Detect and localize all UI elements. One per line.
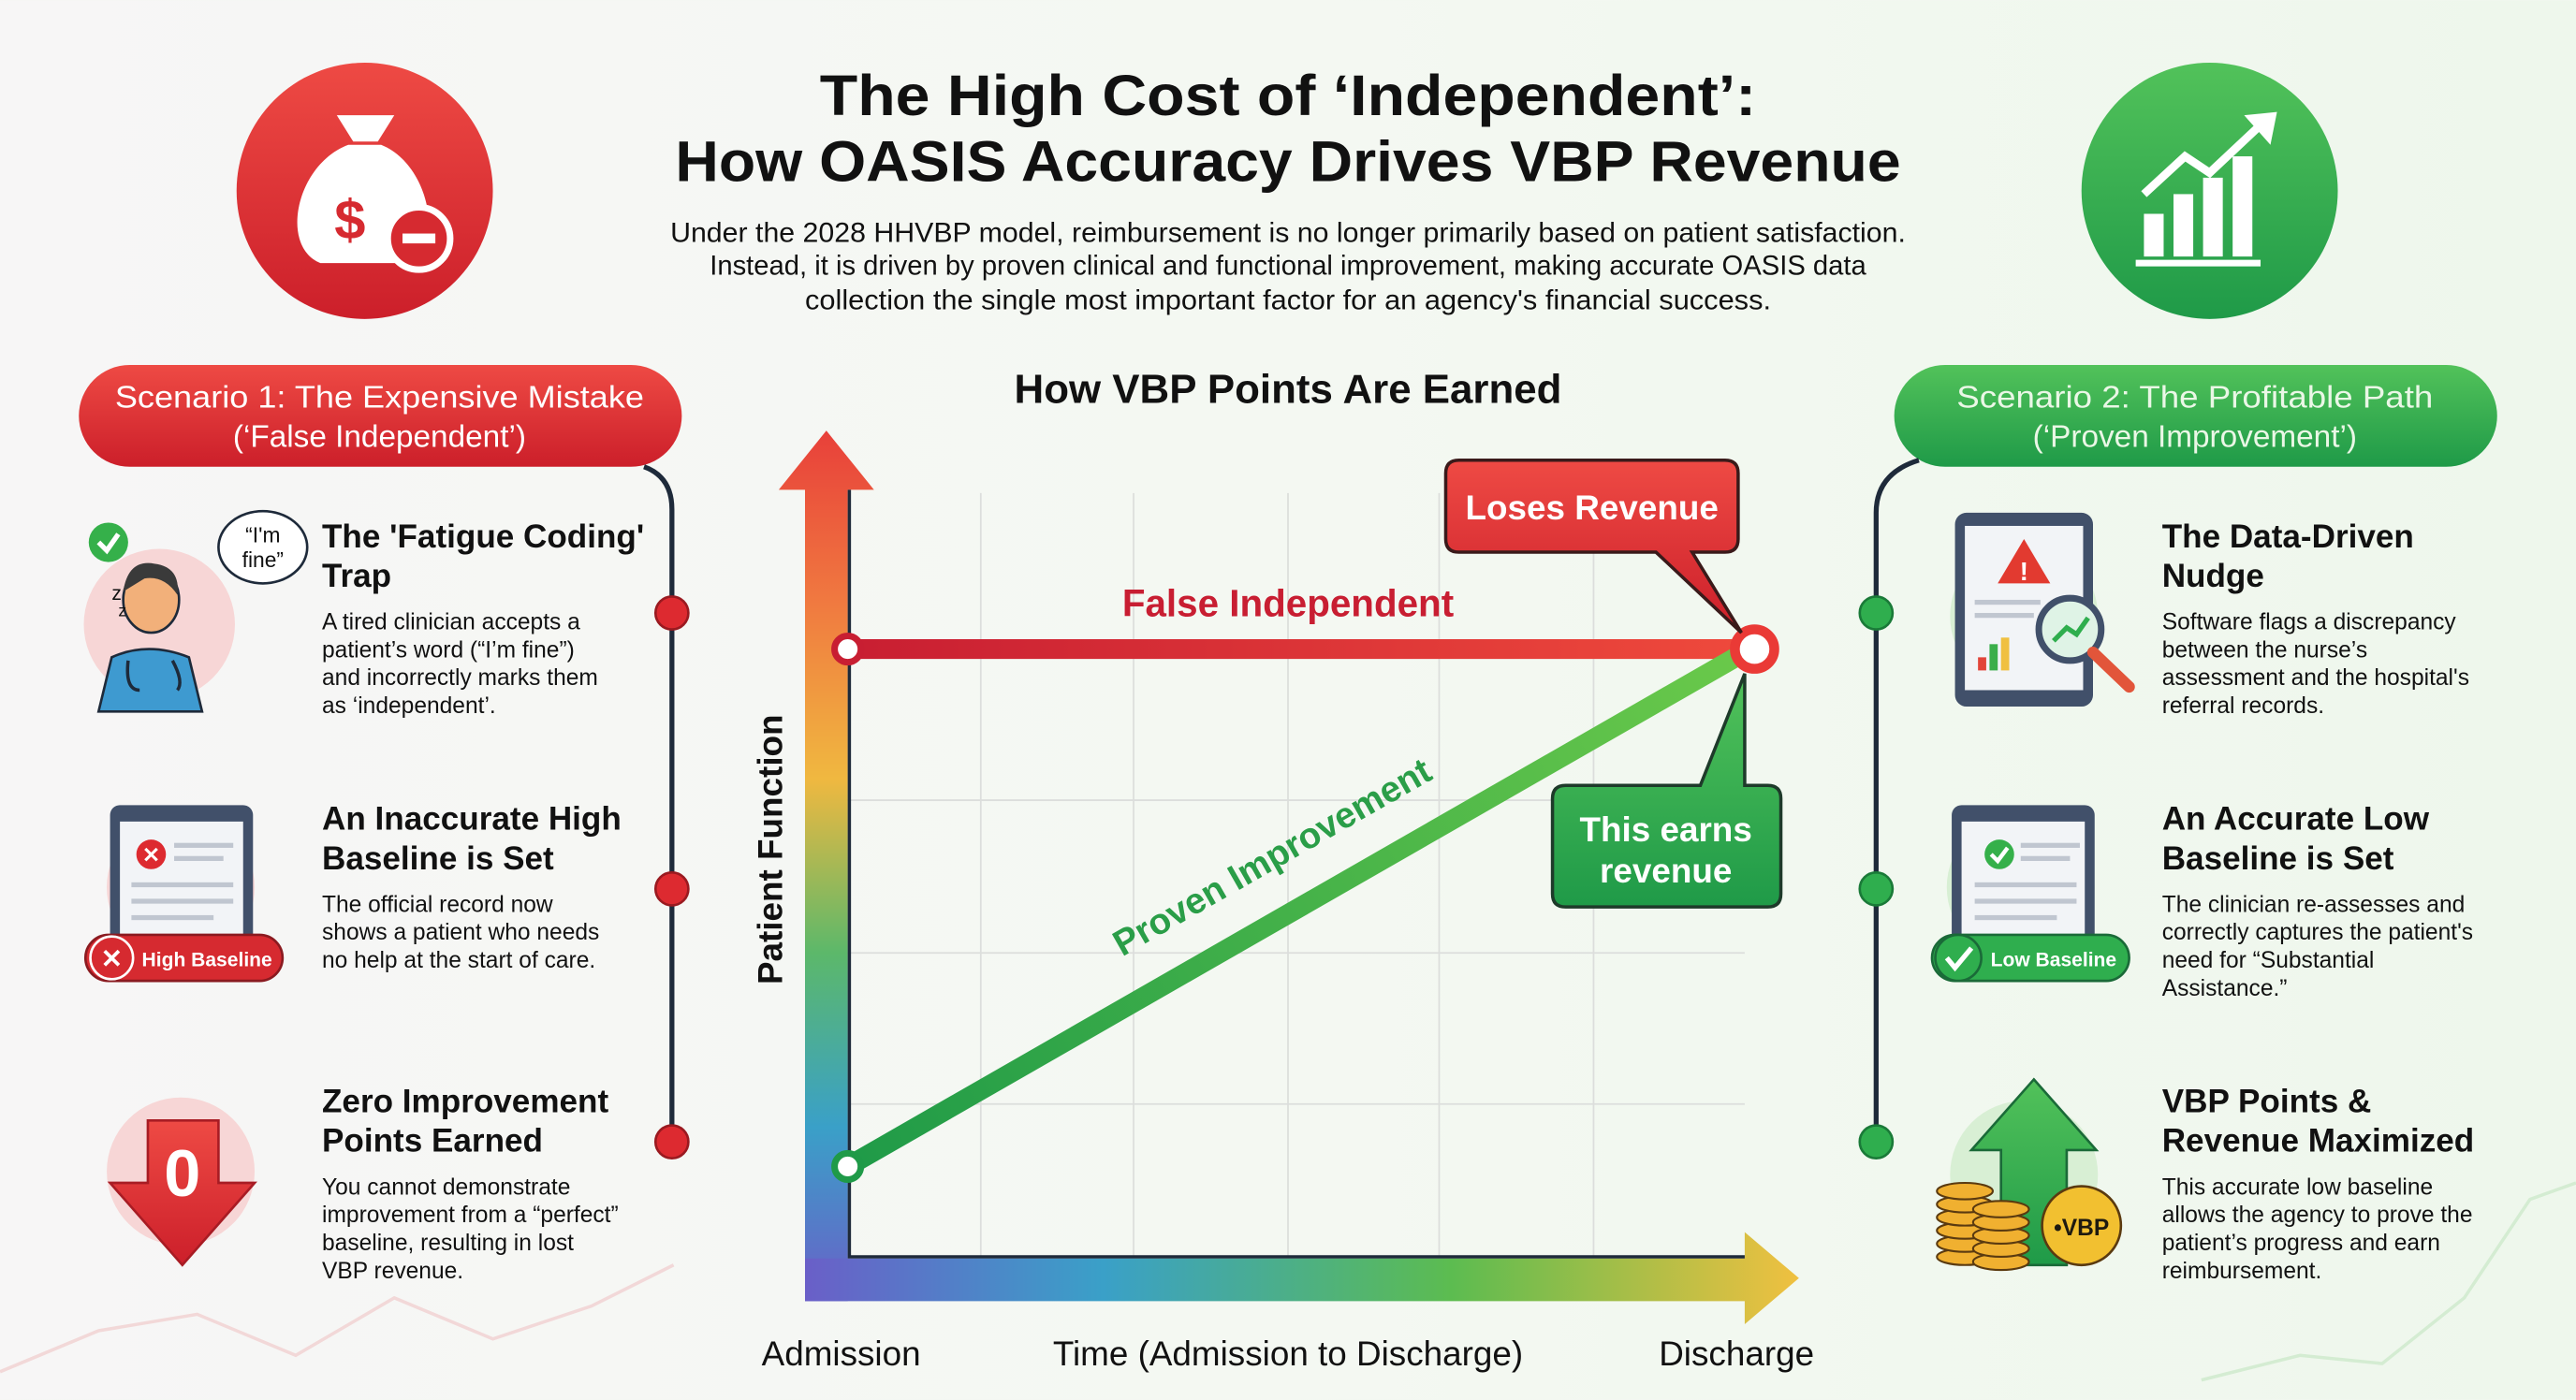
icon: zero down arrow bbox=[107, 1098, 255, 1265]
text block: zero improvement: Zero Improvement bbox=[322, 1084, 608, 1120]
text block: data-driven nudge: The Data-Driven bbox=[2162, 518, 2414, 555]
icon: tired clinician bbox=[84, 511, 307, 711]
y axis arrow bbox=[779, 430, 874, 1301]
icon: high baseline screen: ✕ bbox=[101, 944, 123, 973]
line: false independent bbox=[835, 581, 1754, 663]
panel: scenario 1 bbox=[79, 365, 688, 1284]
text block: data-driven nudge: referral records. bbox=[2162, 693, 2324, 719]
text block: data-driven nudge: Nudge bbox=[2162, 558, 2264, 594]
text block: fatigue coding trap: Trap bbox=[322, 558, 391, 594]
pill: scenario 2 heading bbox=[1895, 365, 2497, 467]
text block: VBP points maximized: Revenue Maximized bbox=[2162, 1123, 2474, 1159]
axis labels: time: Time (Admission to Discharge) bbox=[1053, 1334, 1523, 1373]
panel: scenario 2 bbox=[1860, 365, 2497, 1284]
chart: how VBP points are earned bbox=[751, 366, 1814, 1373]
pill: scenario 2 heading: (‘Proven Improvement’) bbox=[2033, 420, 2357, 455]
icon: green growth chart circle bbox=[2082, 63, 2338, 319]
icon: zero down arrow: 0 bbox=[164, 1136, 200, 1210]
text block: fatigue coding trap: as ‘independent’. bbox=[322, 693, 496, 719]
icon: up arrow with coins and VBP badge bbox=[1937, 1079, 2121, 1270]
text block: fatigue coding trap: A tired clinician accepts a bbox=[322, 610, 580, 635]
pill: scenario 1 heading: Scenario 1: The Expensive Mistake bbox=[115, 381, 644, 416]
subtitle: collection the single most important factor for an agency's financial success. bbox=[805, 284, 1771, 315]
text block: inaccurate high baseline bbox=[322, 801, 622, 973]
subtitle: Under the 2028 HHVBP model, reimbursement is no longer primarily based on patient satisfaction. bbox=[670, 217, 1906, 248]
text block: zero improvement bbox=[322, 1084, 619, 1284]
text block: fatigue coding trap bbox=[322, 518, 644, 719]
icon: tired clinician: fine” bbox=[242, 547, 284, 572]
text block: accurate low baseline: The clinician re-assesses and bbox=[2162, 892, 2465, 917]
line: false independent: False Independent bbox=[1122, 581, 1454, 624]
axis label: patient function: Patient Function bbox=[751, 714, 789, 984]
icon: high baseline screen: ✕ bbox=[142, 843, 160, 868]
x axis arrow bbox=[805, 1232, 1799, 1324]
icon: red money bag circle bbox=[237, 63, 493, 319]
text block: data-driven nudge: between the nurse’s bbox=[2162, 637, 2367, 663]
text block: accurate low baseline: An Accurate Low bbox=[2162, 801, 2430, 838]
icon: tired clinician: z bbox=[118, 601, 126, 620]
text block: zero improvement: VBP revenue. bbox=[322, 1259, 463, 1284]
line: proven improvement: Proven Improvement bbox=[1106, 751, 1439, 964]
text block: accurate low baseline: Baseline is Set bbox=[2162, 840, 2394, 877]
text block: fatigue coding trap: patient’s word (“I’m fine”) bbox=[322, 637, 575, 663]
text block: accurate low baseline: need for “Substantial bbox=[2162, 948, 2374, 973]
line: proven improvement bbox=[835, 654, 1741, 1179]
title: The High Cost of ‘Independent’: bbox=[820, 64, 1756, 128]
text block: accurate low baseline: Assistance.” bbox=[2162, 976, 2287, 1001]
text block: data-driven nudge: Software flags a discrepancy bbox=[2162, 610, 2456, 635]
subtitle bbox=[670, 217, 1906, 315]
axis labels: time bbox=[762, 1334, 1814, 1373]
text block: inaccurate high baseline: An Inaccurate High bbox=[322, 801, 622, 838]
text block: inaccurate high baseline: shows a patient who needs bbox=[322, 920, 599, 945]
text block: accurate low baseline bbox=[2162, 801, 2473, 1001]
callout: this earns revenue bbox=[1553, 674, 1781, 907]
title: How OASIS Accuracy Drives VBP Revenue bbox=[675, 129, 1901, 194]
subtitle: Instead, it is driven by proven clinical and functional improvement, making accurate OASIS data bbox=[710, 250, 1866, 281]
text block: zero improvement: Points Earned bbox=[322, 1123, 543, 1159]
chart title: How VBP Points Are Earned bbox=[1015, 366, 1561, 412]
icon: tired clinician: z bbox=[111, 583, 122, 605]
callout: loses revenue bbox=[1445, 460, 1741, 633]
text block: VBP points maximized: VBP Points & bbox=[2162, 1084, 2371, 1120]
text block: VBP points maximized bbox=[2162, 1084, 2474, 1284]
text block: VBP points maximized: This accurate low baseline bbox=[2162, 1174, 2433, 1200]
text block: accurate low baseline: correctly captures the patient's bbox=[2162, 920, 2473, 945]
icon: tablet with magnifier bbox=[1950, 513, 2130, 707]
callout: this earns revenue: revenue bbox=[1600, 852, 1732, 890]
icon: high baseline screen: High Baseline bbox=[142, 949, 272, 970]
axis labels: time: Discharge bbox=[1659, 1334, 1814, 1373]
icon: tablet with magnifier: ! bbox=[2020, 557, 2028, 586]
callout: loses revenue: Loses Revenue bbox=[1466, 489, 1719, 527]
text block: inaccurate high baseline: no help at the start of care. bbox=[322, 948, 595, 973]
icon: red money bag circle: $ bbox=[334, 188, 365, 251]
text block: VBP points maximized: allows the agency to prove the bbox=[2162, 1203, 2473, 1228]
text block: zero improvement: You cannot demonstrate bbox=[322, 1174, 570, 1200]
text block: zero improvement: baseline, resulting in lost bbox=[322, 1231, 574, 1256]
icon: high baseline screen bbox=[85, 805, 283, 981]
text block: fatigue coding trap: The 'Fatigue Coding' bbox=[322, 518, 644, 555]
text block: inaccurate high baseline: Baseline is Set bbox=[322, 840, 554, 877]
text block: data-driven nudge bbox=[2162, 518, 2469, 719]
callout: this earns revenue: This earns bbox=[1580, 810, 1752, 849]
pill: scenario 1 heading bbox=[79, 365, 681, 467]
pill: scenario 2 heading: Scenario 2: The Profitable Path bbox=[1956, 381, 2433, 416]
icon: up arrow with coins and VBP badge: •VBP bbox=[2054, 1216, 2109, 1241]
pill: scenario 1 heading: (‘False Independent’) bbox=[233, 420, 526, 455]
axis labels: time: Admission bbox=[762, 1334, 921, 1373]
text block: data-driven nudge: assessment and the hospital's bbox=[2162, 665, 2469, 691]
text block: VBP points maximized: reimbursement. bbox=[2162, 1259, 2321, 1284]
text block: zero improvement: improvement from a “perfect” bbox=[322, 1203, 619, 1228]
title bbox=[675, 64, 1901, 194]
icon: low baseline screen bbox=[1932, 805, 2130, 981]
text block: VBP points maximized: patient’s progress and earn bbox=[2162, 1231, 2440, 1256]
text block: inaccurate high baseline: The official record now bbox=[322, 892, 553, 917]
icon: tired clinician: “I'm bbox=[245, 523, 280, 547]
icon: low baseline screen: Low Baseline bbox=[1991, 949, 2116, 970]
text block: fatigue coding trap: and incorrectly marks them bbox=[322, 665, 598, 691]
